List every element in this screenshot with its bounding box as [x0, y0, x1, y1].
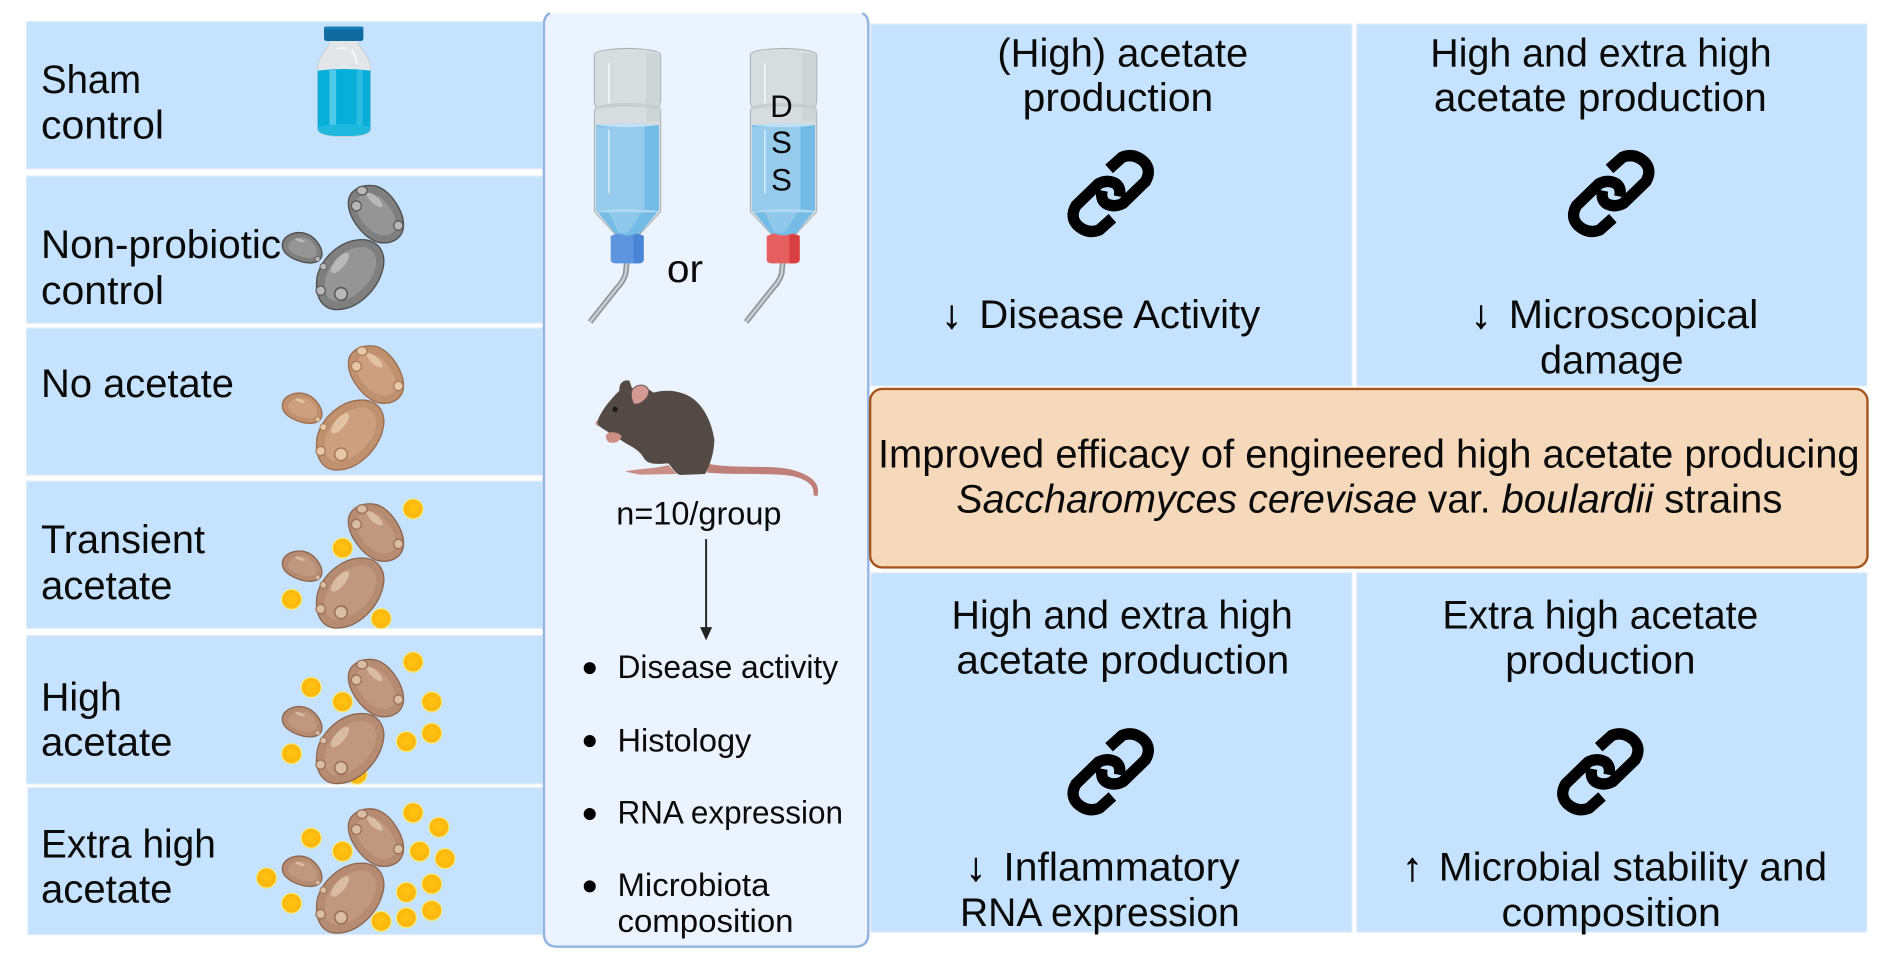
heading: high and extra high acetate production: acetate production — [1434, 76, 1767, 120]
label: sham control: control — [41, 104, 164, 148]
label: high acetate: acetate — [41, 721, 172, 765]
text: microbial stability and composition: Microbial stability and — [1439, 845, 1827, 889]
text: callout line two: strains — [1664, 478, 1782, 522]
arrow: mouse to outcomes — [700, 539, 712, 640]
panel: extra high acetate row — [28, 788, 543, 935]
text: disease activity: Disease Activity — [979, 293, 1260, 337]
text: microscopical damage: ↓ — [1471, 293, 1491, 337]
label: extra high acetate — [41, 822, 216, 912]
icon: chain link — [1563, 734, 1638, 810]
label: DSS: S — [771, 125, 792, 160]
panel: no acetate row — [27, 328, 543, 475]
label: transient acetate: Transient — [41, 518, 205, 562]
label: extra high acetate: acetate — [41, 868, 172, 912]
icon: yeast with more acetate dots — [282, 652, 442, 784]
text: inflammatory RNA expression — [960, 845, 1240, 935]
panel: inflammatory expression result — [871, 573, 1352, 935]
icon: grey yeast cells — [282, 185, 404, 310]
text: microscopical damage: Microscopical — [1509, 293, 1758, 337]
heading: high and extra high acetate production: High and extra high — [952, 593, 1293, 637]
icon: mouse — [595, 380, 818, 496]
label: transient acetate — [41, 518, 205, 608]
label: extra high acetate: Extra high — [41, 822, 216, 866]
text: microscopical damage — [1471, 293, 1758, 382]
panel: disease activity result — [871, 24, 1352, 386]
text: callout line one: Improved efficacy of engineered high acetate producing — [878, 432, 1860, 476]
text: callout line two — [956, 478, 1782, 522]
heading: high and extra high acetate production — [1430, 31, 1772, 120]
label: non-probiotic control: Non-probiotic — [41, 223, 281, 267]
label: DSS: D — [770, 89, 793, 124]
label: n per group: n=10/group — [616, 496, 781, 532]
label: high acetate — [41, 675, 172, 765]
label: DSS: S — [771, 163, 792, 198]
list: outcome measures: Disease activity — [617, 649, 838, 685]
icon: chain link — [1574, 156, 1649, 231]
icon: chain link — [1073, 734, 1148, 810]
icon: brown yeast cells — [282, 346, 404, 470]
heading: extra high acetate production — [1442, 593, 1758, 683]
icon: yeast with few acetate dots — [282, 499, 423, 629]
text: inflammatory RNA expression: Inflammatory — [1003, 845, 1240, 889]
heading: high and extra high acetate production: acetate production — [956, 639, 1289, 683]
list: outcome measures: Microbiota — [617, 867, 770, 903]
icon: water bottle red cap with DSS — [746, 48, 817, 322]
text: callout line two: Saccharomyces cerevisae — [956, 478, 1417, 522]
text: microbial stability and composition: ↑ — [1403, 845, 1422, 889]
text: disease activity: ↓ — [942, 293, 962, 337]
heading: high acetate production: (High) acetate — [997, 31, 1248, 75]
list: outcome measures — [584, 649, 843, 939]
heading: extra high acetate production: production — [1505, 639, 1696, 683]
label: non-probiotic control: control — [41, 269, 164, 313]
text: inflammatory RNA expression: ↓ — [966, 845, 986, 889]
label: non-probiotic control — [41, 223, 281, 313]
panel: non-probiotic control row — [27, 176, 543, 323]
text: callout line two: var. — [1428, 478, 1491, 522]
list: outcome measures: composition — [617, 903, 794, 939]
panel: high acetate row — [27, 636, 543, 784]
panel: experimental setup — [544, 13, 868, 947]
icon: water bottle blue cap — [590, 48, 661, 322]
list: outcome measures: RNA expression — [617, 795, 843, 831]
heading: extra high acetate production: Extra high acetate — [1442, 593, 1758, 637]
panel: sham control row — [27, 22, 543, 169]
text: inflammatory RNA expression: RNA expression — [960, 891, 1240, 935]
text: microscopical damage: damage — [1540, 338, 1684, 382]
heading: high acetate production: production — [1023, 76, 1213, 120]
heading: high and extra high acetate production: High and extra high — [1430, 31, 1772, 75]
panel: microscopical damage result — [1357, 24, 1867, 386]
icon: vial — [317, 27, 371, 137]
icon: chain link — [1073, 156, 1148, 231]
label: sham control — [41, 58, 164, 148]
label: sham control: Sham — [41, 58, 141, 102]
label: transient acetate: acetate — [41, 564, 172, 608]
text: callout line two: boulardii — [1501, 478, 1655, 522]
text: microbial stability and composition: composition — [1501, 891, 1721, 935]
callout: improved efficacy — [870, 389, 1867, 567]
label: or: or — [667, 248, 703, 291]
text: microbial stability and composition — [1403, 845, 1827, 935]
heading: high acetate production — [997, 31, 1248, 120]
panel: transient acetate row — [27, 481, 543, 629]
panel: microbial stability result — [1357, 573, 1867, 935]
list: outcome measures: Histology — [617, 722, 751, 758]
icon: yeast with many acetate dots — [257, 803, 455, 933]
label: no acetate: No acetate — [41, 362, 234, 406]
label: DSS — [770, 89, 793, 198]
heading: high and extra high acetate production — [952, 593, 1293, 683]
label: high acetate: High — [41, 675, 122, 719]
